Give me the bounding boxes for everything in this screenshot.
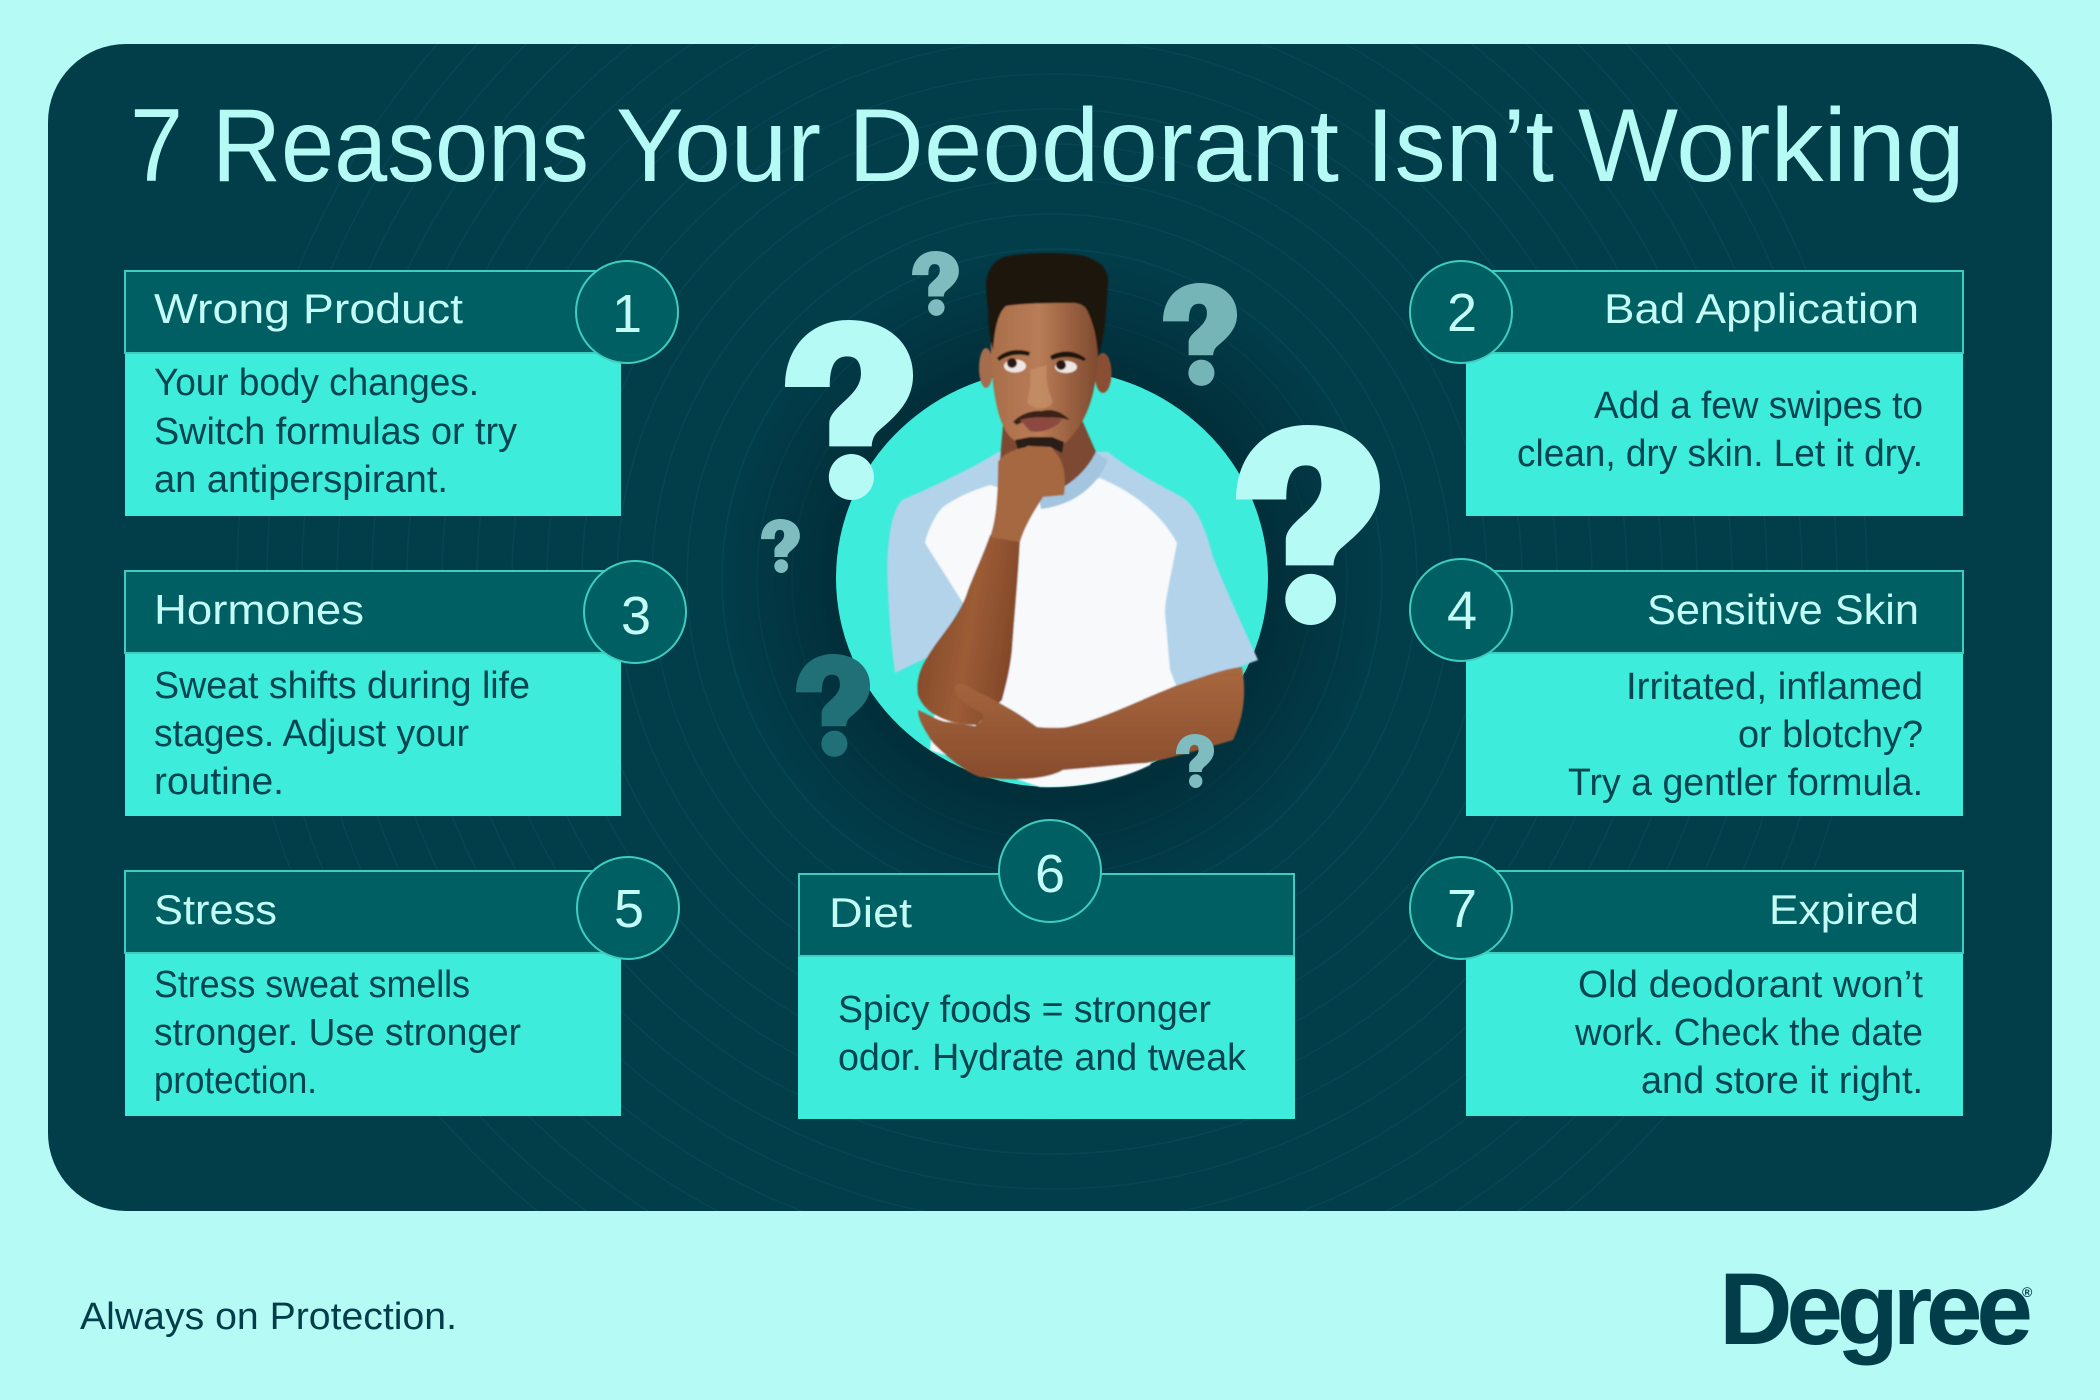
neck bbox=[1000, 420, 1096, 497]
panel: card 6 diet bbox=[798, 820, 1295, 1119]
eyebrows bbox=[997, 350, 1030, 361]
panel: card 3 hormones: stages. Adjust your bbox=[154, 713, 469, 755]
panel: card 1 wrong product: Your body changes. bbox=[154, 362, 479, 404]
panel: card 7 expired bbox=[1410, 857, 1963, 1116]
icon: thinking man bbox=[887, 253, 1258, 787]
panel: card 6 diet: Spicy foods = stronger bbox=[838, 989, 1211, 1031]
panel: card 3 hormones: 3 bbox=[621, 586, 651, 646]
panel: card 5 stress: 5 bbox=[614, 879, 644, 939]
title: Your bbox=[616, 88, 821, 204]
panel: card 5 stress: stronger. Use stronger bbox=[154, 1012, 521, 1054]
panel: card 1 wrong product: Switch formulas or try bbox=[154, 411, 517, 453]
lower arm and hand bbox=[918, 667, 1244, 779]
panel: card 6 diet: Diet bbox=[829, 889, 912, 936]
shirt torso bbox=[925, 478, 1178, 787]
panel: card 5 stress: protection. bbox=[154, 1060, 317, 1102]
mouth bbox=[1020, 417, 1062, 432]
panel: card 4 sensitive skin: or blotchy? bbox=[1738, 714, 1923, 756]
ears bbox=[979, 348, 993, 388]
hair bbox=[986, 253, 1108, 355]
panel: card 6 diet: odor. Hydrate and tweak bbox=[838, 1037, 1247, 1079]
panel: card 6 diet: 6 bbox=[1035, 844, 1065, 904]
panel: card 3 hormones: Hormones bbox=[154, 586, 364, 633]
shirt sleeves and yoke bbox=[887, 452, 1258, 692]
panel: card 3 hormones: Sweat shifts during life bbox=[154, 665, 530, 707]
panel: card 4 sensitive skin: Sensitive Skin bbox=[1647, 586, 1919, 633]
raised hand bbox=[990, 446, 1065, 542]
raised forearm bbox=[917, 535, 1020, 725]
icon: medium question mark lower left bbox=[796, 654, 870, 757]
nose highlight bbox=[1027, 365, 1053, 408]
logo: Degree: Degree bbox=[1719, 1252, 2033, 1366]
panel: card 1 wrong product bbox=[125, 261, 678, 516]
tagline: Always on Protection. bbox=[80, 1296, 457, 1338]
panel: card 1 wrong product: 1 bbox=[612, 284, 642, 344]
panel: card 7 expired: work. Check the date bbox=[1574, 1012, 1923, 1054]
icon: large question mark left bbox=[785, 320, 913, 500]
moustache bbox=[1013, 410, 1070, 425]
title bbox=[130, 88, 1965, 204]
panel: card 2 bad application: 2 bbox=[1447, 283, 1477, 343]
panel: dark background bbox=[48, 44, 2052, 1211]
face bbox=[991, 298, 1098, 450]
panel: card 7 expired: Old deodorant won’t bbox=[1578, 964, 1923, 1006]
panel: card 3 hormones bbox=[125, 561, 686, 816]
panel: card 4 sensitive skin bbox=[1410, 559, 1963, 816]
panel: card 5 stress: Stress bbox=[154, 886, 277, 933]
panel: card 7 expired: and store it right. bbox=[1641, 1060, 1923, 1102]
panel: card 2 bad application: clean, dry skin. Let it dry. bbox=[1517, 433, 1923, 475]
panel: card 1 wrong product: an antiperspirant. bbox=[154, 459, 448, 501]
panel: card 2 bad application: Bad Application bbox=[1604, 285, 1919, 332]
title: 7 bbox=[130, 88, 183, 204]
title: Deodorant bbox=[848, 88, 1339, 204]
panel: card 7 expired: 7 bbox=[1447, 879, 1477, 939]
icon: medium question mark top right bbox=[1163, 283, 1237, 386]
icon: teal circle behind man bbox=[836, 369, 1268, 787]
title: Working bbox=[1578, 88, 1965, 204]
panel: card 3 hormones: routine. bbox=[154, 761, 284, 803]
logo: Degree: ® bbox=[2022, 1284, 2033, 1300]
eyes bbox=[1004, 360, 1026, 372]
panel: card 1 wrong product: Wrong Product bbox=[154, 285, 463, 332]
panel: card 5 stress bbox=[125, 857, 679, 1116]
icon: small question mark over arm bbox=[1176, 734, 1214, 788]
collar bbox=[1039, 452, 1108, 509]
panel: card 5 stress: Stress sweat smells bbox=[154, 964, 470, 1006]
panel: card 4 sensitive skin: Irritated, inflamed bbox=[1626, 666, 1923, 708]
panel: card 7 expired: Expired bbox=[1769, 886, 1919, 933]
title: Reasons bbox=[212, 88, 589, 204]
goatee bbox=[1015, 437, 1064, 453]
icon: small question mark top bbox=[912, 251, 959, 316]
panel: card 4 sensitive skin: 4 bbox=[1447, 581, 1477, 641]
panel: card 2 bad application: Add a few swipes to bbox=[1594, 385, 1923, 427]
title: Isn’t bbox=[1366, 88, 1554, 204]
icon: large question mark right bbox=[1236, 425, 1380, 625]
panel: card 4 sensitive skin: Try a gentler formula. bbox=[1568, 762, 1923, 804]
icon: small question mark left bbox=[761, 519, 800, 573]
panel: card 2 bad application bbox=[1410, 261, 1963, 516]
